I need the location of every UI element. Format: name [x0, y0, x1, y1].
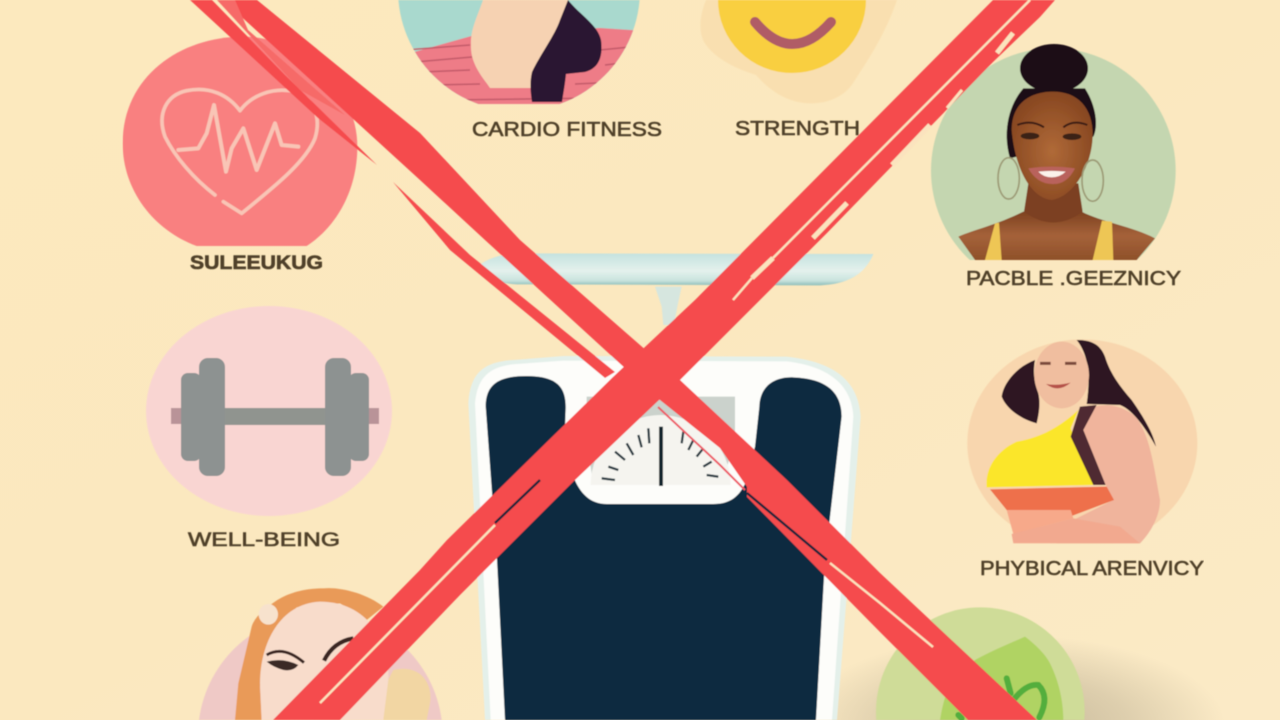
scale platform: [475, 253, 873, 285]
label: cardio fitness: CARDIO FITNESS: [472, 119, 662, 141]
stroke: top-right to bottom-left: [273, 0, 1055, 720]
scale stem: [655, 287, 682, 325]
icon: smiling face: [700, 0, 897, 103]
label: well-being: WELL-BEING: [188, 530, 340, 551]
dark gaps over panel: [495, 480, 827, 560]
thin strip: upper left: [190, 0, 615, 378]
stroke: top-left to bottom-right: [223, 0, 1037, 720]
label: heart icon: SULEEUKUG: [190, 253, 323, 274]
portrait: cardio fitness: [398, 0, 640, 105]
thin strip: pale wedge: [217, 0, 345, 115]
icon: heart rate: [123, 37, 357, 246]
scale dial: [587, 397, 735, 486]
bathroom scale: [468, 253, 873, 720]
scale dark panel: [486, 376, 842, 720]
thin strip: across dial: [658, 407, 745, 490]
label: woman with hair bun: PACBLE .GEEZNICY: [966, 268, 1181, 290]
label: physical activity: PHYBICAL ARENVICY: [980, 558, 1204, 580]
portrait: woman with orange hair: [199, 588, 442, 720]
floor shadow: [795, 635, 1225, 720]
portrait: woman in yellow top: [967, 339, 1197, 547]
portrait: woman with hair bun: [930, 43, 1176, 261]
streaks: [320, 0, 1030, 703]
scale body: [468, 356, 861, 720]
icon: green leaf: [876, 607, 1085, 720]
icon: dumbbell: [146, 306, 392, 516]
label: strength: STRENGTH: [735, 118, 860, 140]
red cross: [190, 0, 1055, 720]
